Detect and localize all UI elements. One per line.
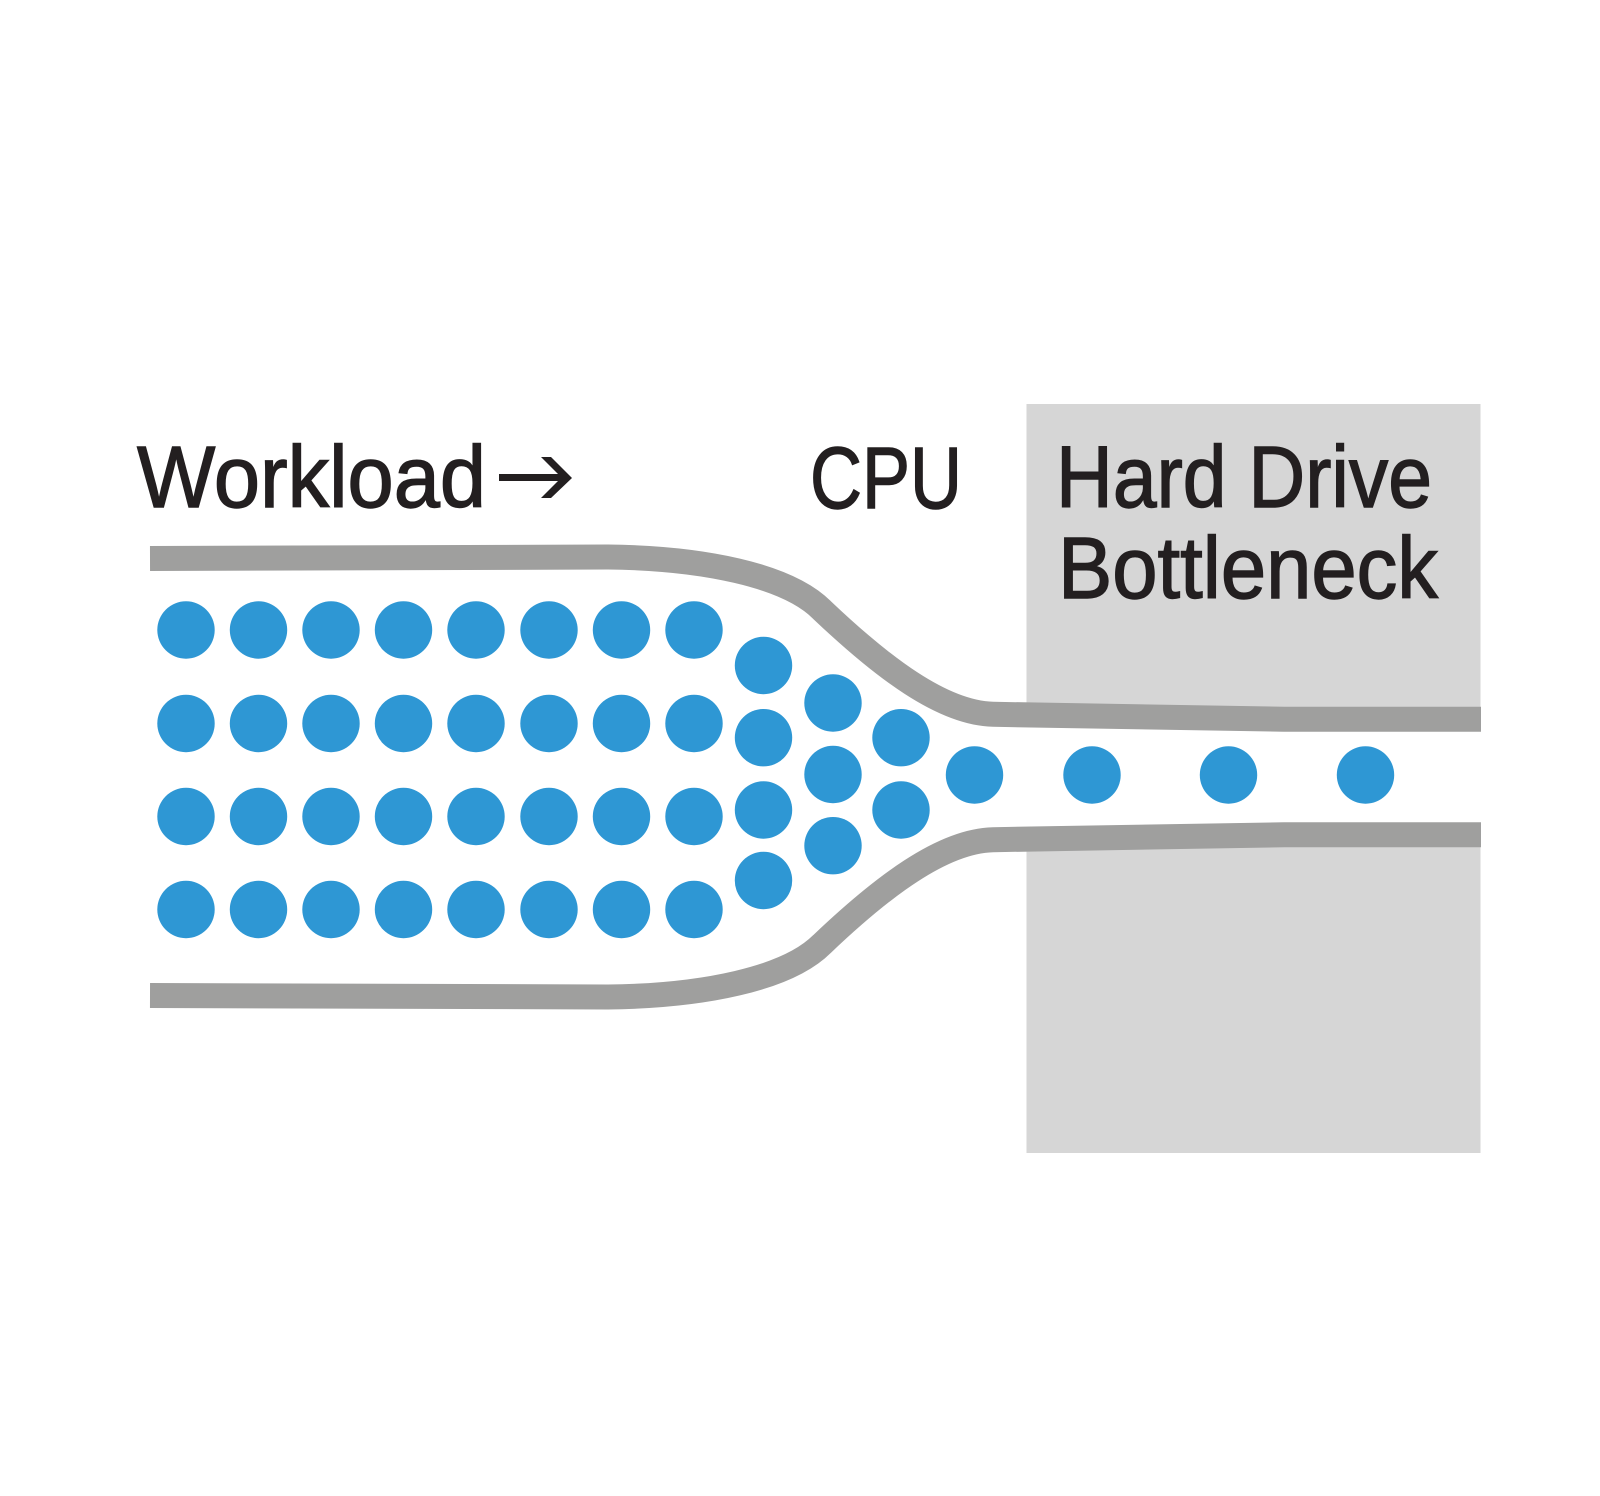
label: CPU: CPU: [810, 430, 962, 527]
panel: hard drive background: [1026, 404, 1480, 1153]
pipe interior: [990, 726, 1481, 828]
label: Hard Drive Bottleneck: [1056, 429, 1438, 617]
pipe top wall: [150, 557, 1481, 719]
workload dots: [157, 601, 1394, 938]
pipe bottom wall: [150, 835, 1481, 997]
label: Workload: Workload: [137, 429, 486, 526]
label: Hard Drive Bottleneck: Bottleneck: [1058, 520, 1438, 617]
icon: arrow: [499, 457, 572, 498]
label: Hard Drive Bottleneck: Hard Drive: [1056, 429, 1432, 526]
